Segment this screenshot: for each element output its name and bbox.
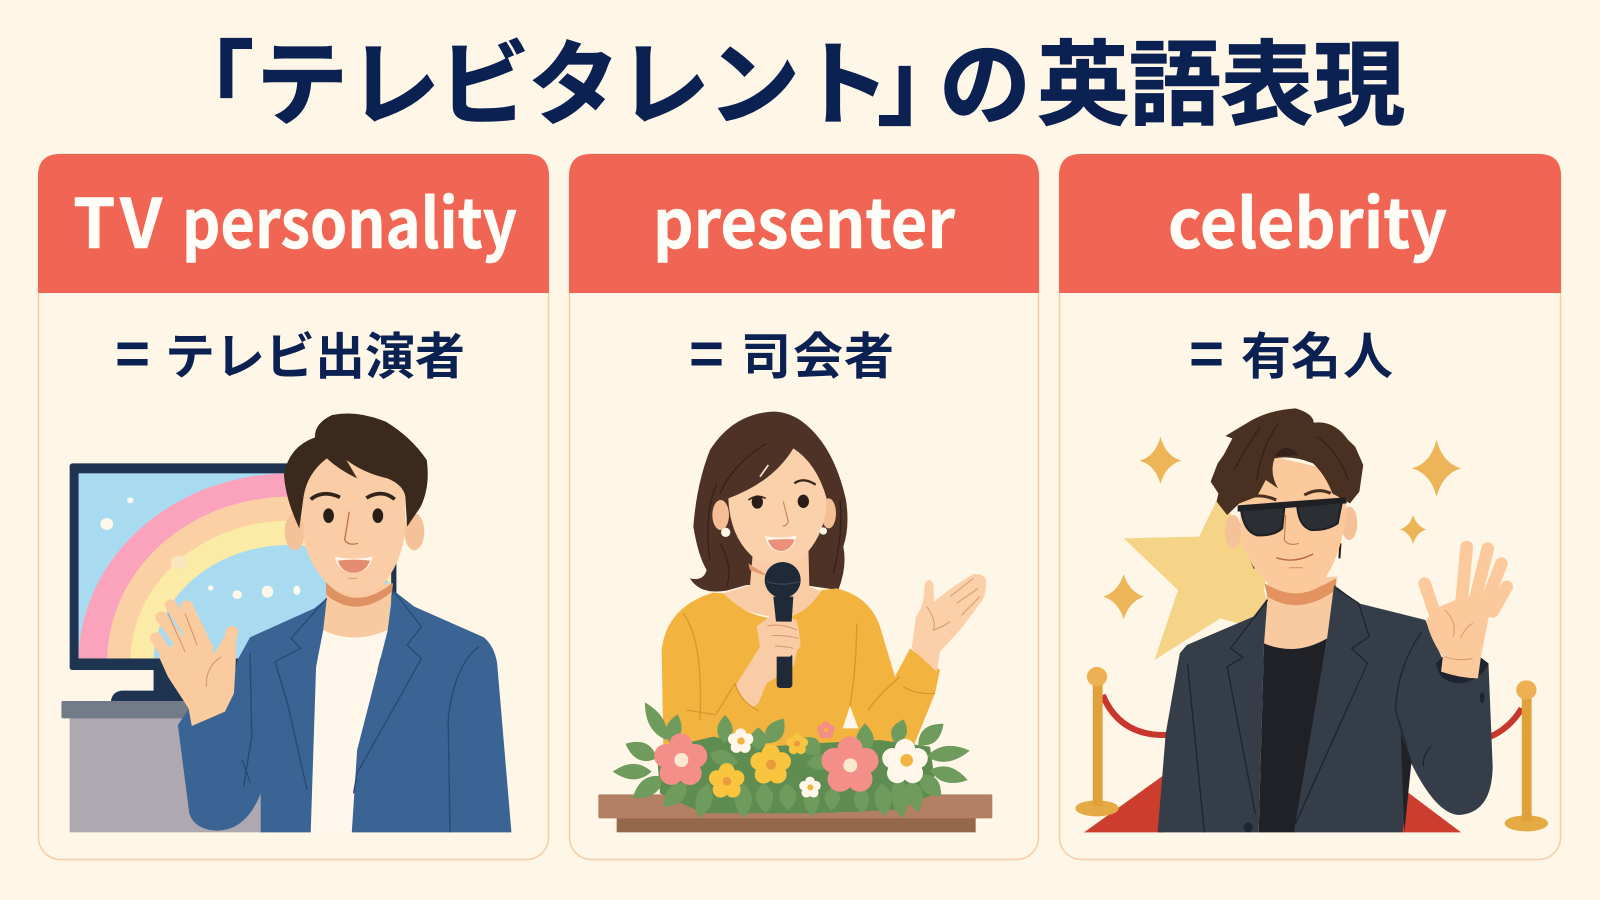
term heading: celebrity [1168,169,1447,268]
Japanese meaning: 司会者 [741,329,894,385]
Japanese meaning: = [115,320,150,387]
term heading: personality [182,169,517,268]
figure: man [178,413,511,832]
card outline [38,154,548,860]
Japanese meaning: = [1189,320,1224,387]
card outline [1060,154,1560,860]
Japanese meaning: テレビ出演者 [165,329,465,385]
icon: waving hand [1425,547,1507,678]
figure: man in dark jacket [1158,408,1493,832]
panel: TV personality [38,154,549,860]
term heading: presenter [653,169,955,268]
icon: rope barrier [1075,667,1548,831]
icon: red carpet [1084,775,1461,832]
figure: woman [662,412,940,747]
panel: presenter [569,154,1039,860]
icon: star [1124,497,1274,660]
illustration: man in front of TV [61,413,511,850]
Japanese meaning: 有名人 [1241,329,1393,385]
header band [38,154,549,293]
icon: sunglasses [1238,497,1347,535]
Japanese meaning: = [689,320,724,387]
card outline [570,154,1038,860]
panel: celebrity [1059,154,1561,860]
header band [569,154,1039,293]
icon: sparkles [1103,437,1461,619]
icon: television [70,463,396,701]
title: 「テレビタレント」の英語表現 [162,35,1405,137]
icon: podium [598,794,992,832]
icon: microphone [765,562,801,688]
illustration: celebrity with sunglasses [1075,408,1548,832]
icon: waving hand [156,605,236,726]
icon: TV stand [61,701,262,832]
icon: raised hand [912,574,986,672]
icon: flower arrangement [613,699,971,820]
header band [1059,154,1561,293]
illustration: woman with microphone [598,412,992,832]
term heading: TV [73,169,163,268]
